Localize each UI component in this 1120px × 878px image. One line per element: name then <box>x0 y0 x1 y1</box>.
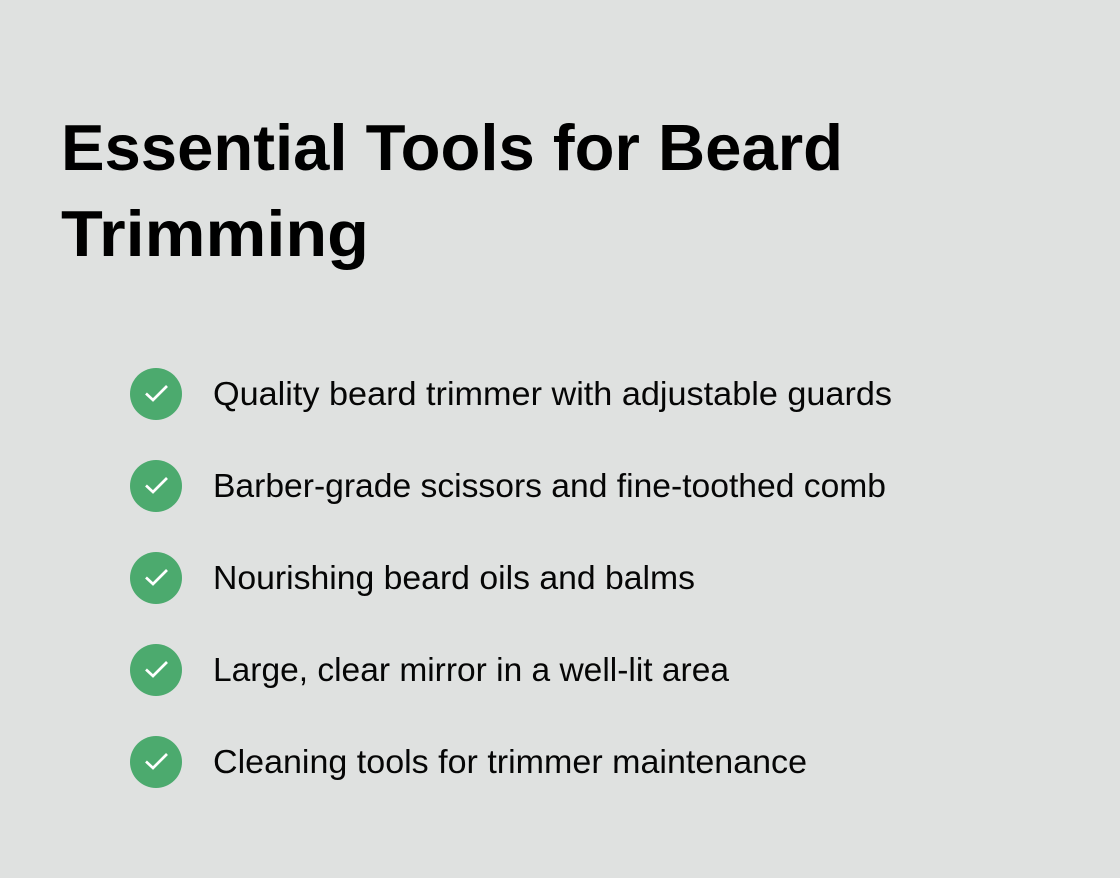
item 4: mirror <box>130 644 730 696</box>
item 2: scissors and comb <box>130 460 886 512</box>
item 2: scissors and comb: Barber-grade scissors and fine-toothed comb <box>213 467 886 504</box>
item 3: oils and balms: Nourishing beard oils and balms <box>213 559 695 596</box>
item 1: trimmer: Quality beard trimmer with adjustable guards <box>213 375 892 412</box>
checklist <box>130 368 892 788</box>
item 4: mirror: Large, clear mirror in a well-lit area <box>213 651 730 688</box>
item 3: oils and balms <box>130 552 695 604</box>
title: Essential Tools for Beard <box>61 111 843 184</box>
item 1: trimmer <box>130 368 892 420</box>
title <box>61 111 843 270</box>
title: Trimming <box>61 197 369 270</box>
item 5: cleaning tools <box>130 736 807 788</box>
item 5: cleaning tools: Cleaning tools for trimmer maintenance <box>213 743 807 780</box>
